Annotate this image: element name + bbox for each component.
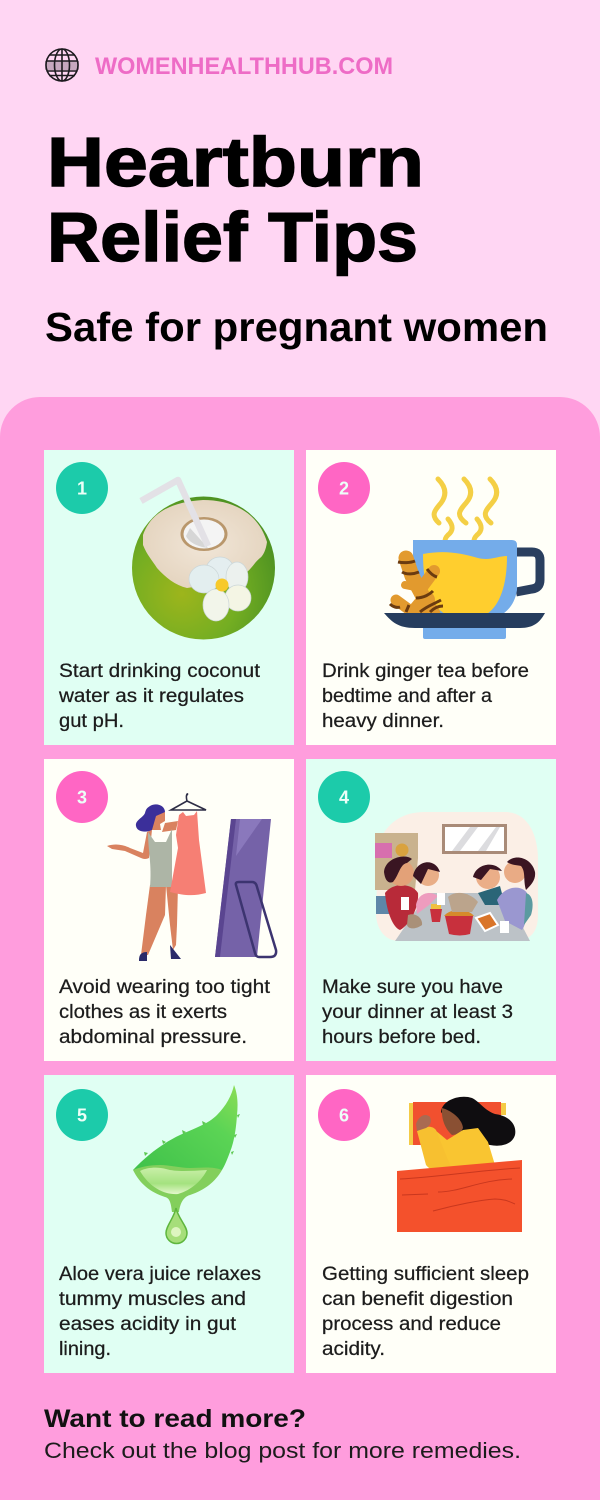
flower xyxy=(189,557,251,621)
text: abdominal pressure. xyxy=(59,1026,247,1048)
cup xyxy=(413,540,517,616)
panel: card 2 ginger tea xyxy=(306,450,556,745)
text: lining. xyxy=(59,1338,111,1360)
text: Make sure you have xyxy=(322,976,503,998)
straw xyxy=(141,480,208,546)
spikes xyxy=(144,1114,240,1156)
girl xyxy=(416,893,438,914)
cups xyxy=(401,897,409,910)
text: eases acidity in gut xyxy=(59,1313,237,1335)
icon: aloe vera leaf xyxy=(133,1085,240,1244)
badge 6: 6 xyxy=(339,1106,349,1126)
call to action text: Check out the blog post for more remedies. xyxy=(44,1438,521,1463)
mirror xyxy=(442,824,507,854)
body xyxy=(435,1128,495,1175)
badge 1: 1 xyxy=(77,478,87,498)
mother xyxy=(497,888,528,930)
text: can benefit digestion xyxy=(322,1288,513,1310)
text: water as it regulates xyxy=(58,685,244,707)
hair xyxy=(441,1097,515,1146)
text: process and reduce xyxy=(322,1313,501,1335)
text: Avoid wearing too tight xyxy=(59,976,271,998)
text: Getting sufficient sleep xyxy=(322,1263,529,1285)
slip dress xyxy=(148,829,172,887)
text xyxy=(58,660,261,732)
text: clothes as it exerts xyxy=(59,1001,227,1023)
subtitle: Safe for pregnant women xyxy=(45,304,548,350)
text xyxy=(322,660,529,732)
handle xyxy=(516,552,540,592)
title xyxy=(47,123,424,276)
arms xyxy=(107,830,152,859)
tea xyxy=(423,552,507,614)
badge 4 xyxy=(318,771,370,823)
food xyxy=(445,916,473,936)
icon: family dinner xyxy=(375,812,538,941)
text: bedtime and after a xyxy=(322,685,492,707)
badge 2 xyxy=(318,462,370,514)
call to action heading: Want to read more? xyxy=(44,1405,306,1433)
icon: woman with dress and mirror xyxy=(107,794,276,961)
website header xyxy=(45,49,393,81)
badge 4: 4 xyxy=(339,788,349,808)
text xyxy=(59,976,271,1048)
face xyxy=(152,812,165,830)
text: heavy dinner. xyxy=(322,710,444,732)
legs xyxy=(141,885,166,955)
dress xyxy=(170,811,206,895)
shelf xyxy=(375,833,418,890)
badge 6 xyxy=(318,1089,370,1141)
icon: coconut xyxy=(132,480,275,640)
boy xyxy=(478,886,505,905)
badge 3: 3 xyxy=(77,788,87,808)
panel: card 5 aloe vera xyxy=(44,1075,294,1373)
steam xyxy=(434,479,497,547)
badge 1 xyxy=(56,462,108,514)
face xyxy=(442,1108,463,1135)
panel: card 6 sleep xyxy=(306,1075,556,1373)
text xyxy=(59,1263,261,1360)
pillow xyxy=(409,1103,413,1145)
panel: card 1 coconut water xyxy=(44,450,294,745)
mirror xyxy=(215,819,271,957)
saucer xyxy=(384,613,545,628)
title: Heartburn xyxy=(47,123,424,201)
hair xyxy=(136,804,165,832)
panel: card 3 loose clothes xyxy=(44,759,294,1061)
text: tummy muscles and xyxy=(59,1288,246,1310)
text xyxy=(322,976,513,1048)
text: acidity. xyxy=(322,1338,385,1360)
text: your dinner at least 3 xyxy=(322,1001,513,1023)
ginger xyxy=(396,558,434,614)
text xyxy=(322,1263,529,1360)
badge 3 xyxy=(56,771,108,823)
hanger xyxy=(171,794,206,810)
icon: globe xyxy=(45,49,79,81)
arm xyxy=(417,1127,450,1172)
text: Drink ginger tea before xyxy=(322,660,529,682)
badge 5 xyxy=(56,1089,108,1141)
table xyxy=(395,893,530,941)
drop xyxy=(166,1208,187,1244)
panel: pink background xyxy=(0,397,600,1500)
title: Relief Tips xyxy=(47,198,418,276)
blanket xyxy=(397,1160,522,1232)
icon: tea cup xyxy=(384,479,545,639)
text: Aloe vera juice relaxes xyxy=(59,1263,261,1285)
text: gut pH. xyxy=(59,710,124,732)
panel: card 4 early dinner xyxy=(306,759,556,1061)
text: Start drinking coconut xyxy=(59,660,261,682)
badge 2: 2 xyxy=(339,478,349,498)
text: hours before bed. xyxy=(322,1026,481,1048)
icon: sleeping woman xyxy=(397,1097,522,1232)
badge 5: 5 xyxy=(77,1106,87,1126)
gel pulp xyxy=(133,1165,222,1212)
father xyxy=(385,885,418,930)
website name: WOMENHEALTHHUB.COM xyxy=(95,53,393,80)
